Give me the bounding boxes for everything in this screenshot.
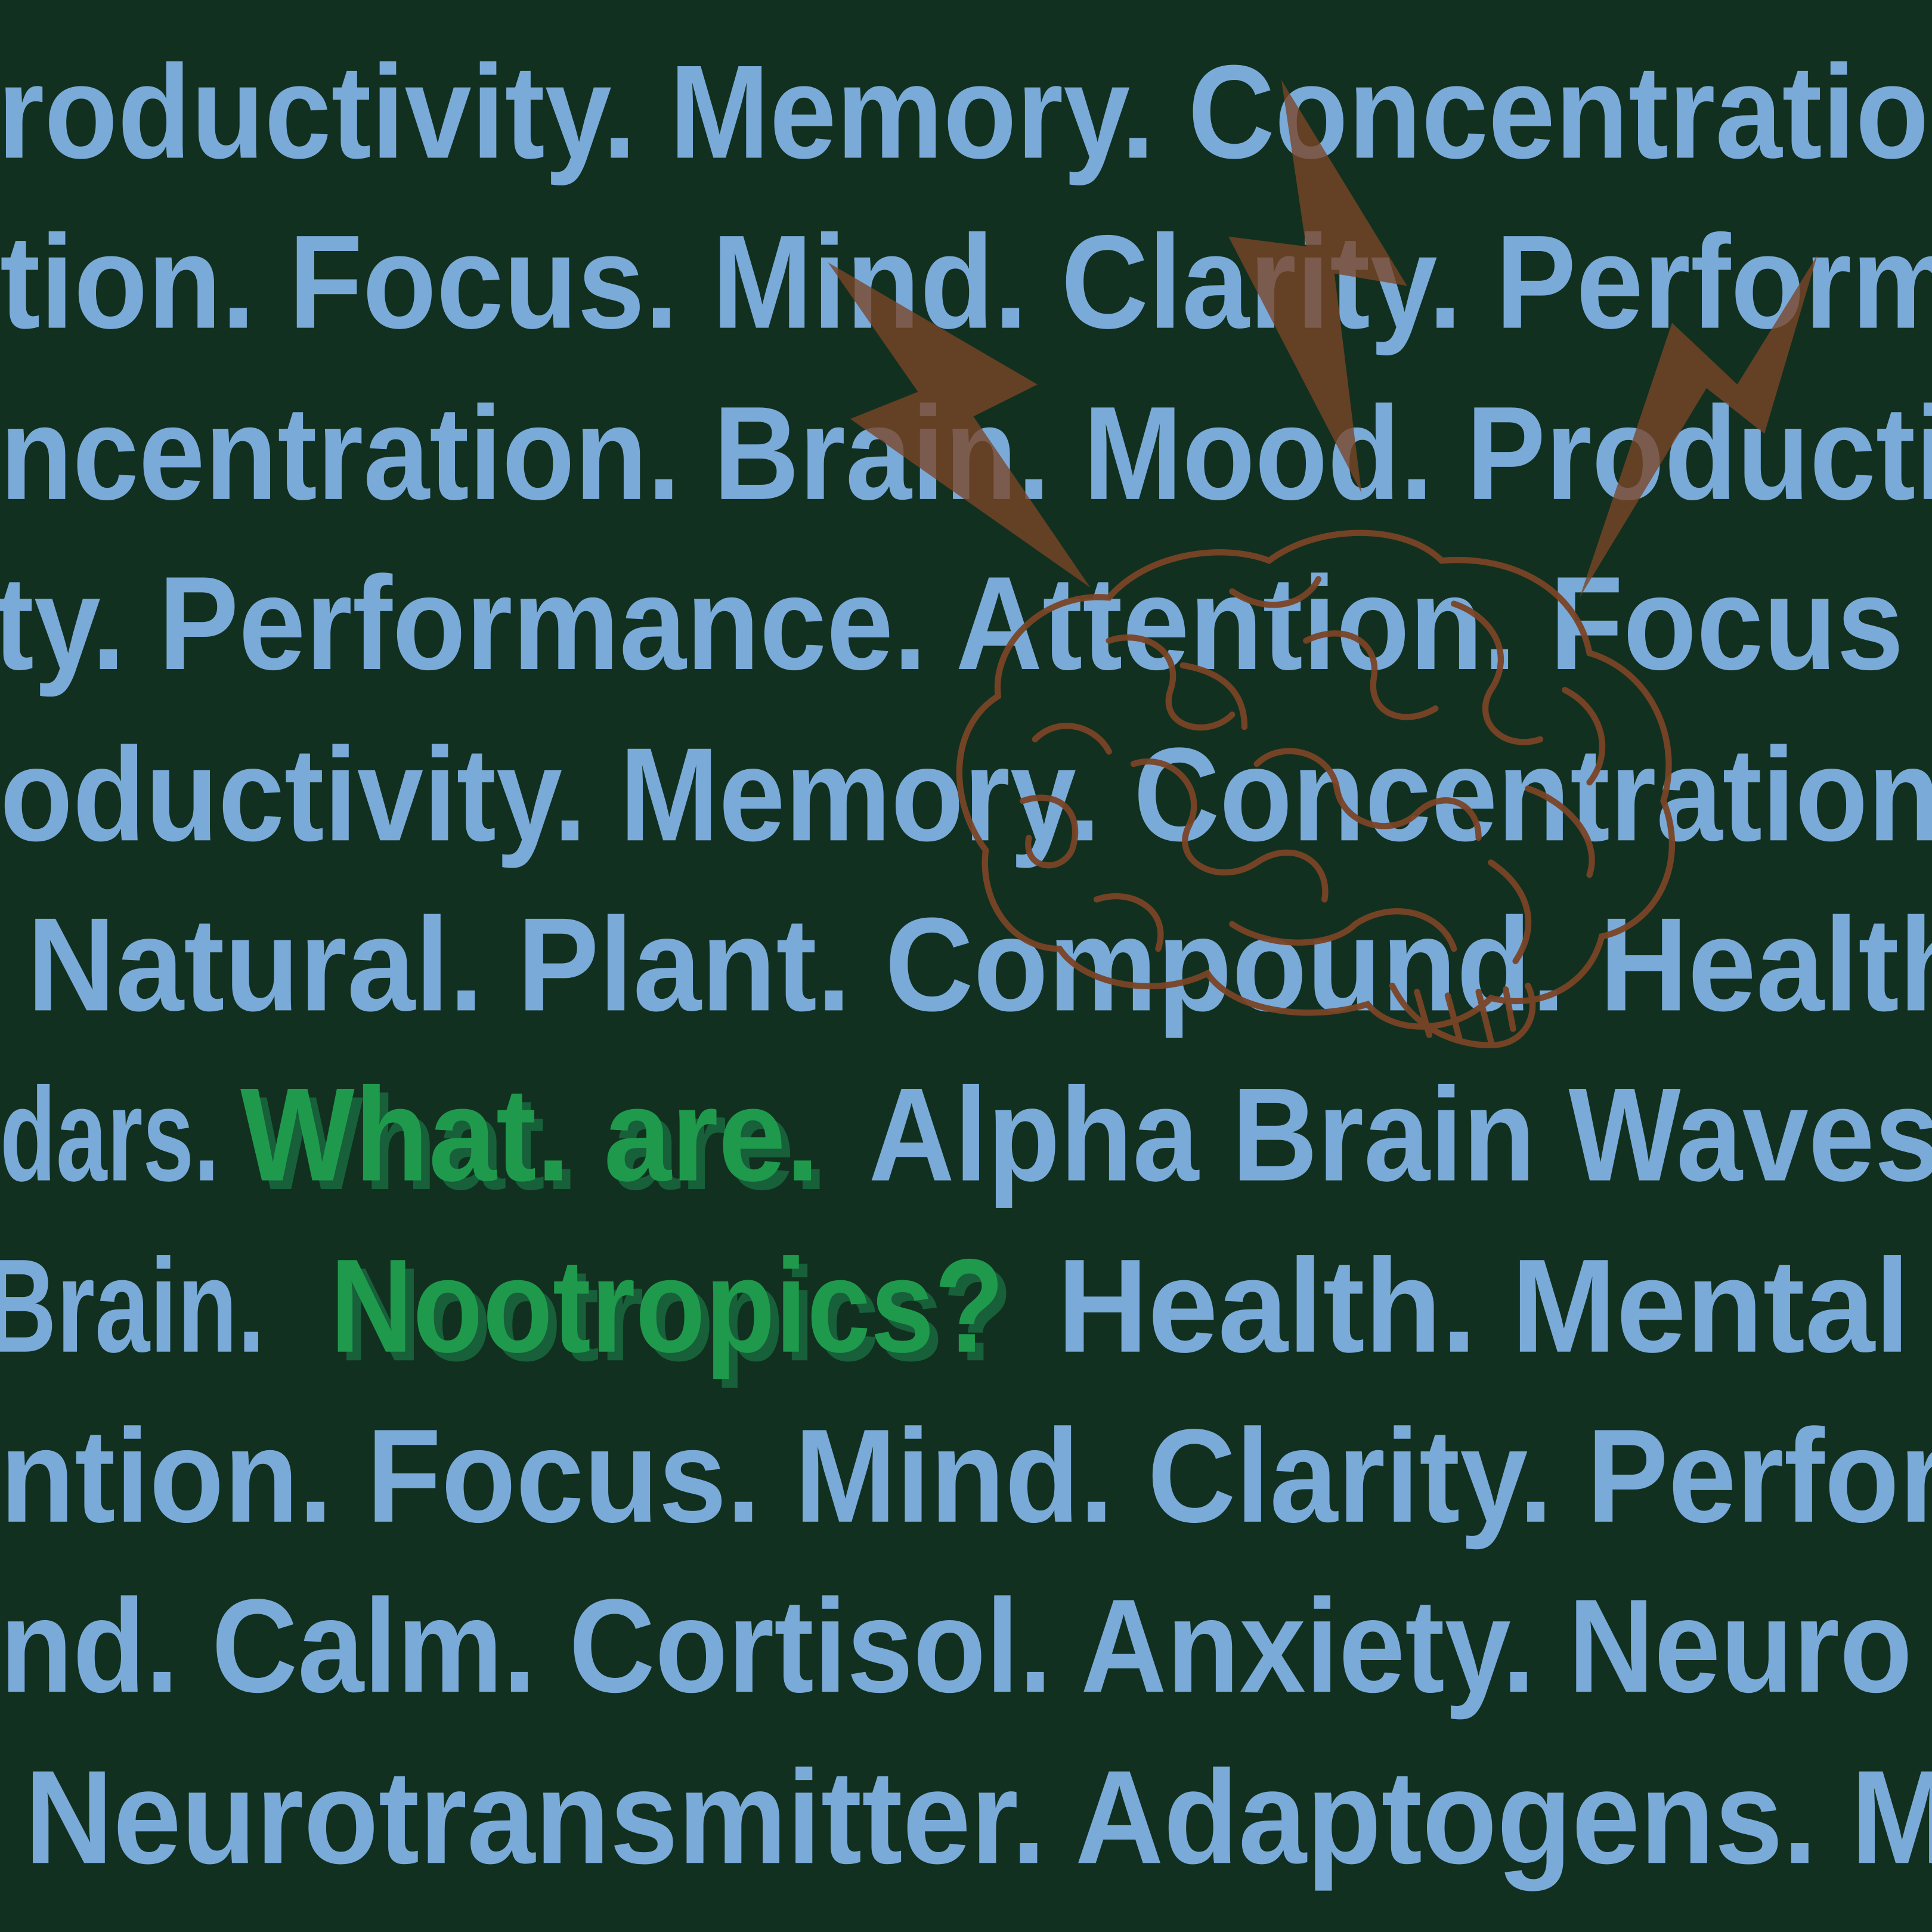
title: What are Nootropics?: Nootropics? xyxy=(330,1232,1004,1380)
title: What are Nootropics?: What. are. xyxy=(240,1061,819,1209)
background word rows: dars. xyxy=(0,1061,219,1209)
title: What are Nootropics?: Nootropics? xyxy=(339,1240,1013,1389)
icon: lightning bolts xyxy=(828,80,1818,597)
title: What are Nootropics? xyxy=(240,1061,1013,1389)
icon: brain outline xyxy=(959,533,1672,1045)
title: What are Nootropics?: What. are. xyxy=(249,1069,828,1218)
